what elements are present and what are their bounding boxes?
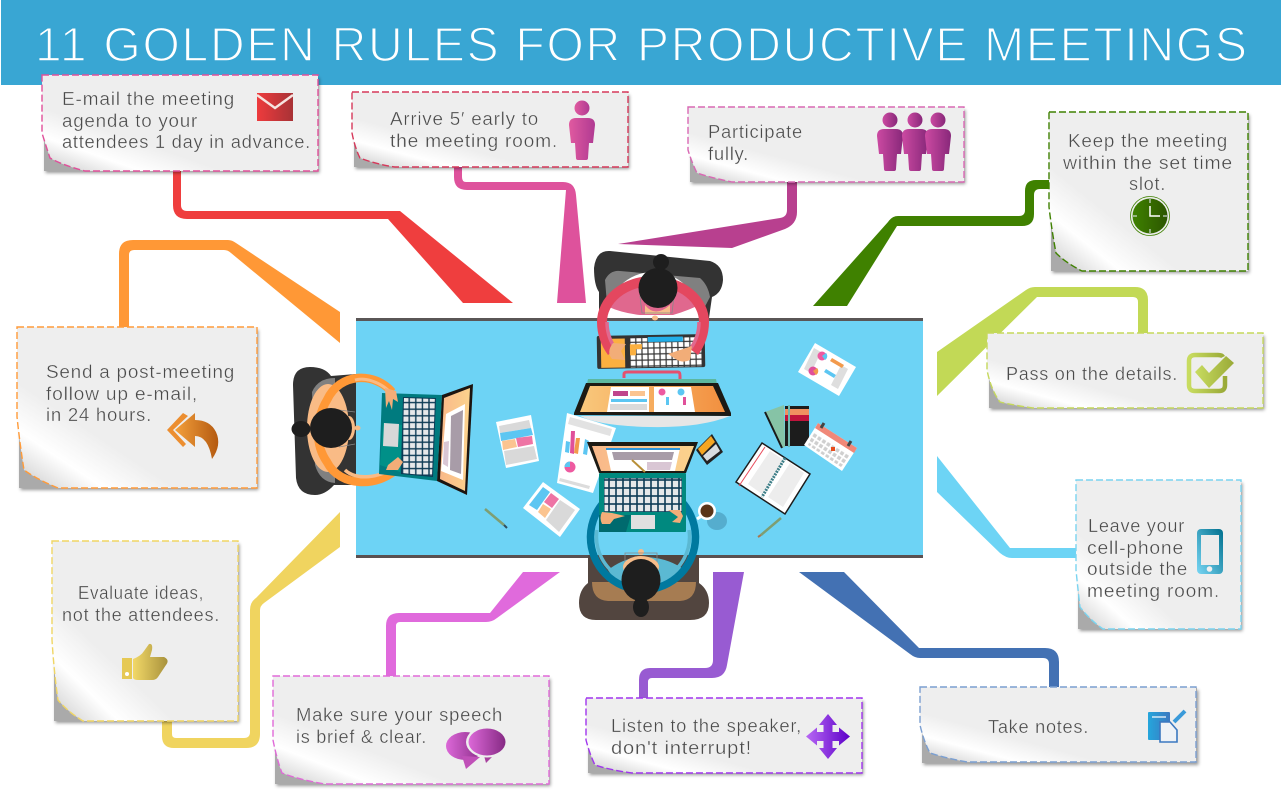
torso xyxy=(307,384,349,472)
note text: in 24 hours. xyxy=(46,405,152,425)
chair xyxy=(579,555,709,620)
chair xyxy=(594,251,723,318)
chair xyxy=(293,367,356,495)
note text: not the attendees. xyxy=(62,605,220,625)
icon: clock xyxy=(1130,196,1170,236)
tablet xyxy=(696,434,723,465)
hair and face xyxy=(343,416,355,440)
icon: move arrows xyxy=(806,714,850,759)
person: bottom xyxy=(579,442,709,620)
note: cell-phone xyxy=(1076,480,1241,629)
note text: Make sure your speech xyxy=(296,705,503,725)
note: listen xyxy=(586,698,862,773)
note: follow up xyxy=(17,327,257,488)
document: tilted report xyxy=(523,482,580,537)
connector: take notes xyxy=(799,572,1059,687)
note text: Send a post-meeting xyxy=(46,362,235,382)
document: left report xyxy=(496,415,539,468)
document: top right report xyxy=(798,343,856,396)
laptop front xyxy=(587,442,698,473)
hands xyxy=(609,343,626,360)
note text: slot. xyxy=(1129,174,1166,194)
table top xyxy=(356,318,923,558)
arms xyxy=(602,281,704,352)
icon: envelope xyxy=(257,93,293,121)
note text: Evaluate ideas, xyxy=(78,583,204,603)
note text: follow up e-mail, xyxy=(46,384,198,404)
connector: cell-phone xyxy=(937,456,1076,558)
document: large chart report xyxy=(557,413,616,493)
connector: follow up xyxy=(119,240,340,343)
note text: cell-phone xyxy=(1087,538,1184,558)
hair and face xyxy=(638,549,644,555)
note text: outside the xyxy=(1087,559,1188,579)
icon: three people xyxy=(877,112,951,171)
hands xyxy=(600,512,625,524)
laptop top xyxy=(587,379,717,384)
icon: person xyxy=(569,100,595,160)
hands xyxy=(385,388,398,410)
note: e-mail agenda xyxy=(42,75,318,171)
hair and face xyxy=(645,305,670,314)
note text: is brief & clear. xyxy=(296,727,427,747)
connector: pass on details xyxy=(937,287,1148,396)
note text: Participate xyxy=(708,122,803,142)
meeting table scene xyxy=(292,251,923,620)
laptop xyxy=(379,393,442,481)
note text: Leave your xyxy=(1088,516,1185,536)
sweater xyxy=(608,557,682,590)
calendar xyxy=(804,423,857,471)
keyboard xyxy=(597,334,705,369)
note: pass on details xyxy=(987,333,1263,408)
title: 11 GOLDEN RULES FOR PRODUCTIVE MEETINGS xyxy=(35,19,1250,72)
sweater xyxy=(609,277,703,315)
note: keep time xyxy=(1049,112,1248,271)
note text: Keep the meeting xyxy=(1068,131,1228,151)
icon: reply all xyxy=(167,413,218,459)
icon: phone xyxy=(1197,529,1223,574)
connector: participate xyxy=(618,182,797,248)
note text: E-mail the meeting xyxy=(62,89,235,109)
note text: fully. xyxy=(708,144,749,164)
arms xyxy=(318,378,400,482)
connector: arrive early xyxy=(454,167,586,303)
connector: brief speech xyxy=(386,572,560,676)
icon: speech bubbles xyxy=(446,726,508,769)
mouse handle xyxy=(624,372,680,379)
connector: evaluate ideas xyxy=(162,512,340,748)
note text: within the set time xyxy=(1062,153,1233,173)
arms xyxy=(590,499,696,590)
note text: Listen to the speaker, xyxy=(611,716,802,736)
note text: agenda to your xyxy=(62,111,198,131)
connector: e-mail agenda xyxy=(173,171,513,303)
note: participate xyxy=(688,107,964,182)
note: take notes xyxy=(920,687,1197,763)
note text: Take notes. xyxy=(988,717,1089,737)
person: top xyxy=(574,251,731,427)
icon: notes and pencil xyxy=(1148,711,1185,742)
pencil: right xyxy=(758,518,781,537)
connector: listen xyxy=(639,572,744,698)
note text: the meeting room. xyxy=(390,131,558,151)
note: evaluate ideas xyxy=(52,541,238,721)
note: arrive early xyxy=(352,92,628,167)
coffee cup xyxy=(697,502,727,530)
note text: Arrive 5′ early to xyxy=(390,109,539,129)
icon: thumbs up xyxy=(122,644,168,680)
note text: meeting room. xyxy=(1087,581,1220,601)
note: brief speech xyxy=(273,676,549,784)
connector: keep time xyxy=(813,180,1049,306)
header banner xyxy=(1,0,1281,85)
note text: don't interrupt! xyxy=(611,738,752,758)
note text: attendees 1 day in advance. xyxy=(62,132,311,152)
notebook xyxy=(736,443,810,514)
note text: Pass on the details. xyxy=(1006,364,1178,384)
icon: check box xyxy=(1189,355,1234,391)
books xyxy=(765,405,809,448)
person: left xyxy=(292,367,473,495)
pencil: left xyxy=(485,509,507,528)
